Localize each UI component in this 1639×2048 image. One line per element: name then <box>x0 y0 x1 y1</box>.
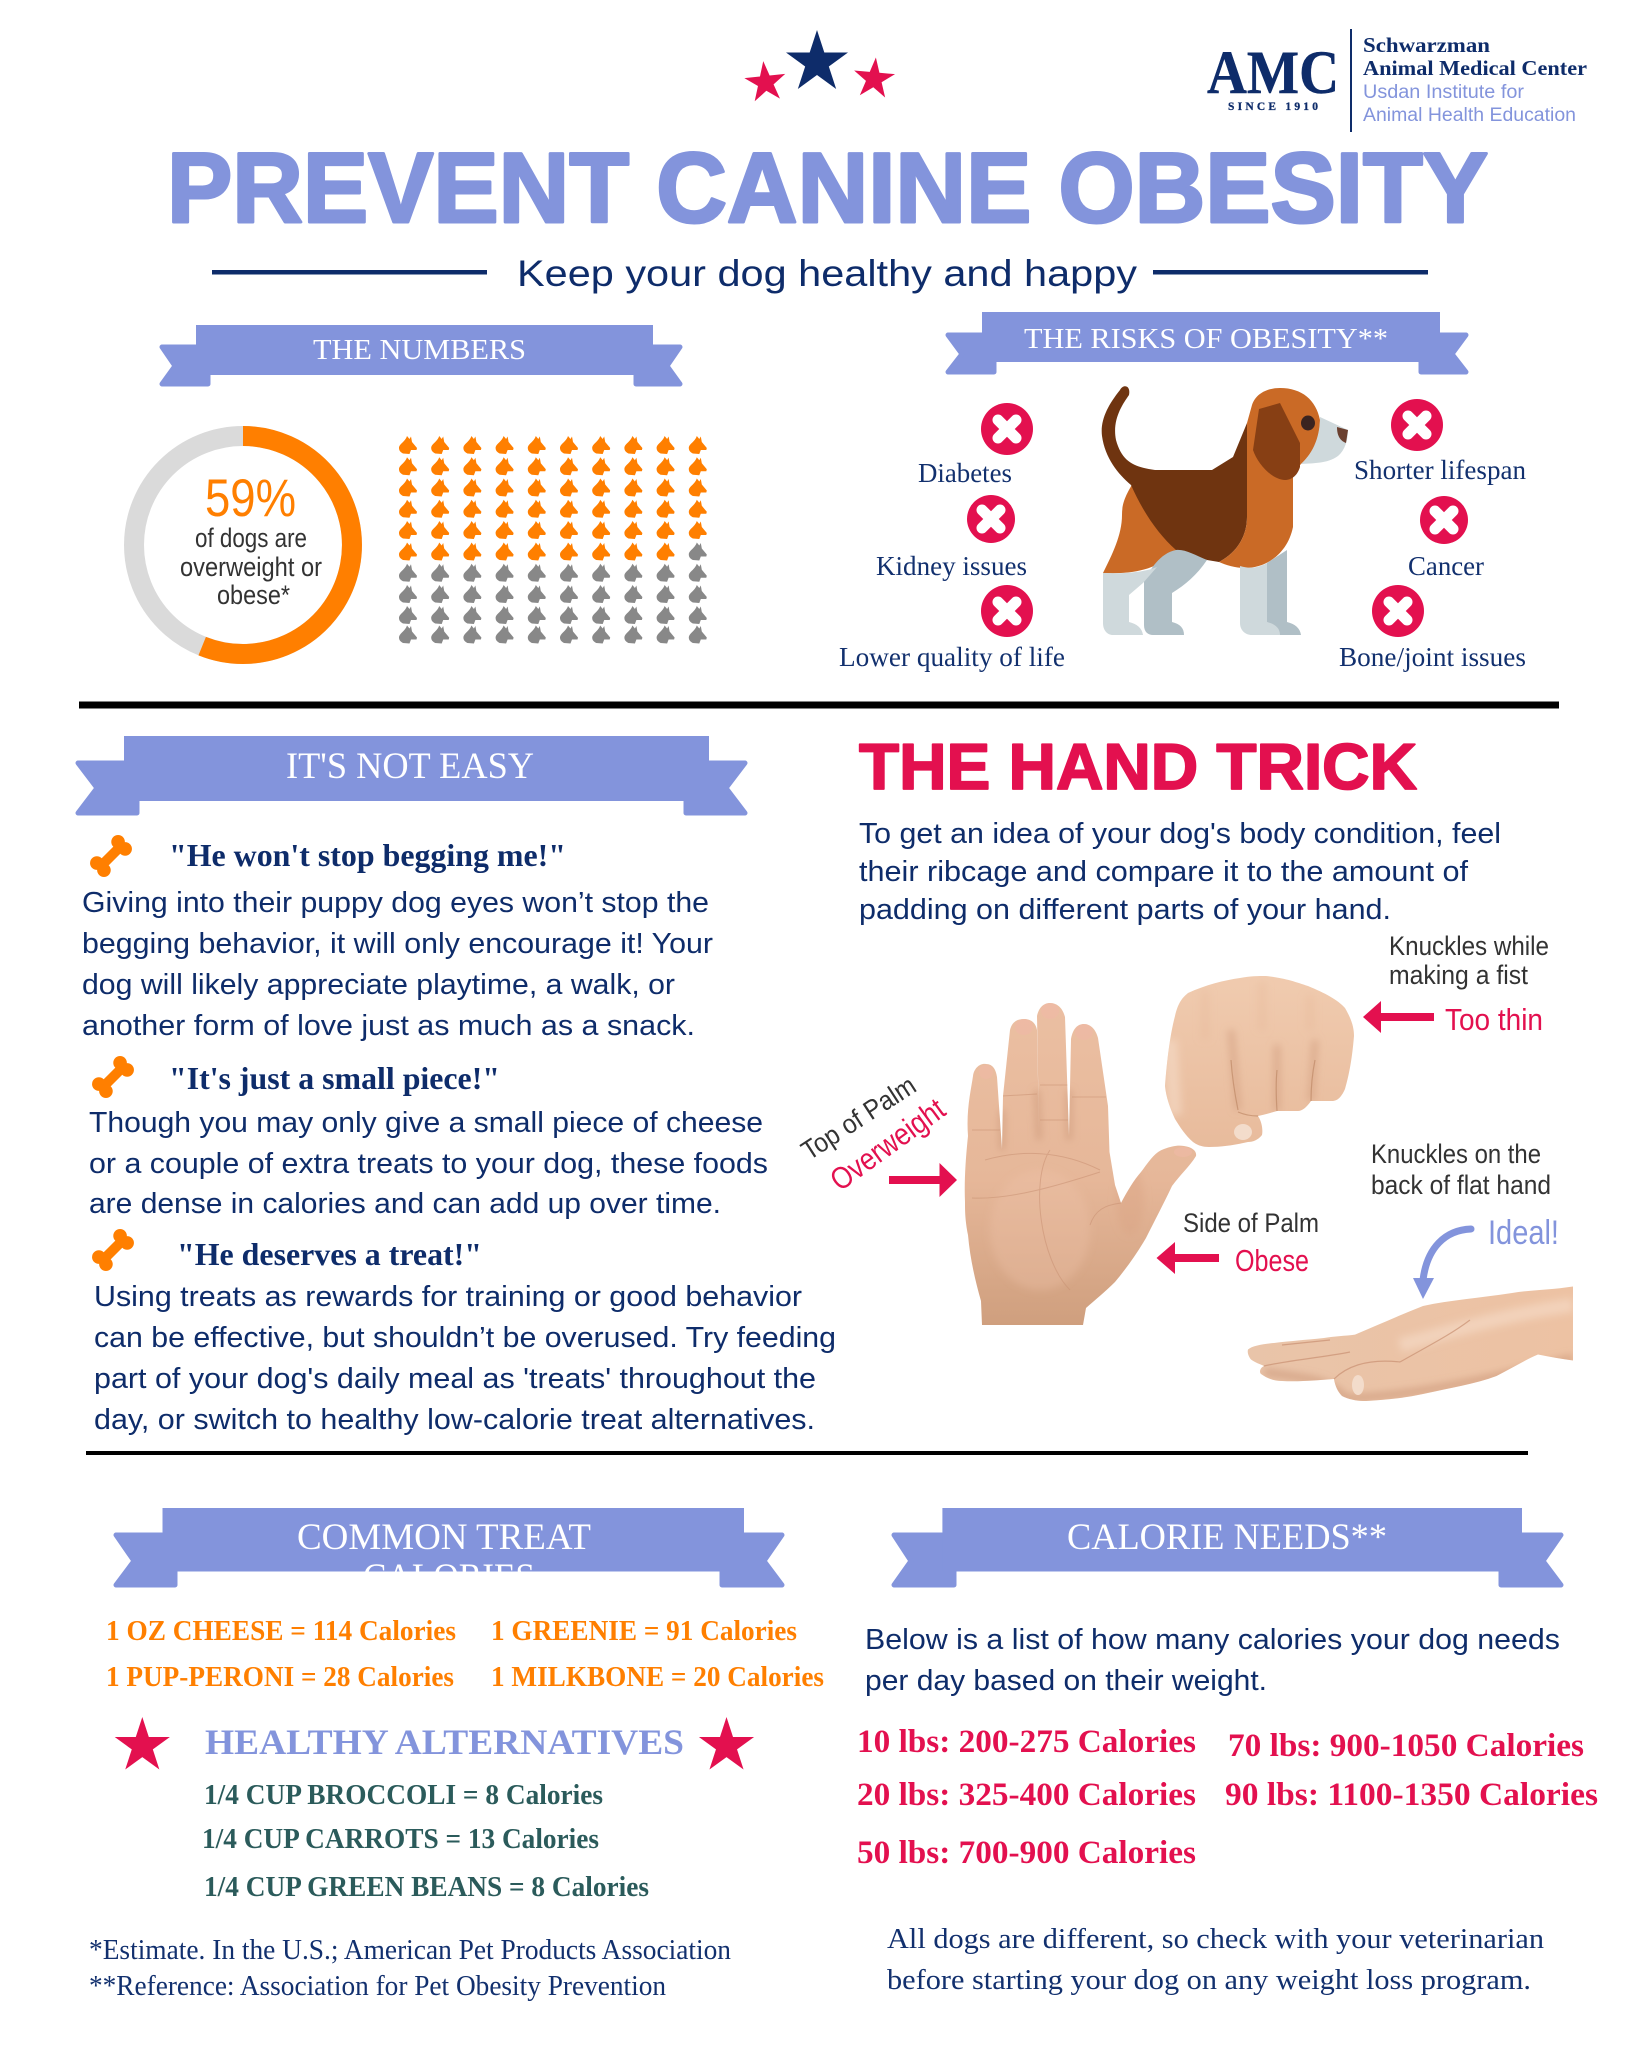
panel: deserves a treat <box>89 1226 836 1436</box>
image: fist <box>1165 976 1354 1147</box>
logo: AMC Schwarzman Animal Medical Center: Usdan Institute for <box>1363 82 1525 103</box>
banner: the numbers: THE NUMBERS <box>313 334 526 366</box>
calorie needs by weight: 50 lbs: 700-900 Calories <box>857 1835 1196 1871</box>
panel: begging <box>82 832 713 1042</box>
hand trick description: To get an idea of your dog's body condition, feel <box>859 818 1501 850</box>
treat calorie list: 1 OZ CHEESE = 114 Calories <box>106 1615 456 1647</box>
label: overweight: Top of Palm <box>796 1070 921 1166</box>
donut chart: 59% <box>134 436 352 654</box>
banner: common treat calories: COMMON TREAT <box>297 1517 591 1558</box>
risk: diabetes <box>918 403 1033 488</box>
icon: bone <box>89 1053 137 1101</box>
icon: bone <box>89 1226 137 1274</box>
calorie needs intro: per day based on their weight. <box>865 1665 1267 1697</box>
logo: AMC Schwarzman Animal Medical Center: Schwarzman <box>1363 33 1490 57</box>
closing note: All dogs are different, so check with your veterinarian <box>887 1923 1545 1955</box>
risk: bone/joint issues <box>1339 585 1526 672</box>
logo: AMC Schwarzman Animal Medical Center: SINCE 1910 <box>1228 101 1318 113</box>
risk: cancer <box>1408 496 1484 581</box>
label: overweight: Overweight <box>824 1091 952 1198</box>
healthy alternatives list: 1/4 CUP GREEN BEANS = 8 Calories <box>204 1871 649 1903</box>
treat calorie list: 1 GREENIE = 91 Calories <box>491 1615 797 1647</box>
subtitle with rules <box>212 253 1428 294</box>
risk: bone/joint issues: Bone/joint issues <box>1339 642 1526 672</box>
label: obese: Side of Palm <box>1183 1208 1319 1238</box>
image: open palm <box>965 1003 1196 1325</box>
calorie needs intro: Below is a list of how many calories your dog needs <box>865 1624 1560 1656</box>
icon: bone <box>87 832 135 880</box>
panel: small piece: Though you may only give a small piece of cheese <box>89 1107 763 1139</box>
healthy alternatives list <box>202 1779 649 1903</box>
calorie needs by weight: 10 lbs: 200-275 Calories <box>857 1724 1196 1760</box>
donut chart: 59%: 59% <box>205 469 296 528</box>
treat calorie list <box>106 1615 824 1693</box>
banner: it's not easy <box>78 736 745 813</box>
risk: diabetes: Diabetes <box>918 458 1012 488</box>
panel: small piece: or a couple of extra treats to your dog, these foods <box>89 1148 768 1180</box>
illustration: beagle dog <box>1102 386 1348 635</box>
pictogram: 59 of 100 dog heads <box>399 436 707 644</box>
heading: healthy alternatives: HEALTHY ALTERNATIVES <box>205 1722 684 1762</box>
healthy alternatives list: 1/4 CUP BROCCOLI = 8 Calories <box>204 1779 603 1811</box>
risk: shorter lifespan: Shorter lifespan <box>1354 455 1527 485</box>
panel: begging: begging behavior, it will only encourage it! Your <box>82 928 713 960</box>
risk: shorter lifespan <box>1354 399 1527 485</box>
panel: begging: Giving into their puppy dog eyes won’t stop the <box>82 887 709 919</box>
panel: deserves a treat: "He deserves a treat!" <box>177 1236 482 1272</box>
banner: the risks of obesity: THE RISKS OF OBESITY** <box>1024 323 1388 355</box>
label: too thin: Knuckles while <box>1389 931 1549 961</box>
logo: AMC Schwarzman Animal Medical Center: Animal Health Education <box>1363 105 1576 126</box>
calorie needs by weight: 20 lbs: 325-400 Calories <box>857 1777 1196 1813</box>
treat calorie list: 1 MILKBONE = 20 Calories <box>491 1661 824 1693</box>
label: obese: Obese <box>1235 1243 1309 1278</box>
panel: begging: another form of love just as much as a snack. <box>82 1010 695 1042</box>
banner: common treat calories: CALORIES <box>363 1557 535 1598</box>
label: too thin: making a fist <box>1389 960 1528 990</box>
banner: it's not easy: IT'S NOT EASY <box>286 746 534 787</box>
donut chart: 59%: overweight or <box>180 552 322 582</box>
banner: the numbers <box>162 325 680 384</box>
logo: AMC Schwarzman Animal Medical Center <box>1207 29 1587 132</box>
label: obese <box>1156 1208 1319 1278</box>
donut chart: 59%: of dogs are <box>195 523 307 553</box>
donut chart: 59%: obese* <box>217 580 290 610</box>
healthy alternatives list: 1/4 CUP CARROTS = 13 Calories <box>202 1823 599 1855</box>
risk: lower quality of life <box>839 585 1065 672</box>
footnotes <box>89 1934 731 2002</box>
panel: begging: "He won't stop begging me!" <box>169 837 566 873</box>
panel: deserves a treat: day, or switch to healthy low-calorie treat alternatives. <box>94 1404 815 1436</box>
label: ideal <box>1371 1139 1559 1299</box>
calorie needs intro <box>865 1624 1560 1697</box>
banner: common treat calories <box>114 1508 784 1588</box>
footnotes: *Estimate. In the U.S.; American Pet Products Association <box>89 1934 731 1966</box>
hand trick description: padding on different parts of your hand. <box>859 894 1391 926</box>
footnotes: **Reference: Association for Pet Obesity Prevention <box>89 1970 666 2002</box>
title: PREVENT CANINE OBESITY <box>167 132 1488 243</box>
panel: deserves a treat: part of your dog's daily meal as 'treats' throughout the <box>94 1363 816 1395</box>
logo: AMC Schwarzman Animal Medical Center: Animal Medical Center <box>1363 56 1587 80</box>
heading: healthy alternatives <box>115 1717 754 1769</box>
image: flat hand <box>1248 1286 1573 1401</box>
banner: calorie needs: CALORIE NEEDS** <box>1067 1517 1387 1558</box>
banner: the risks of obesity <box>948 312 1466 372</box>
panel: small piece <box>89 1053 768 1220</box>
panel: deserves a treat: can be effective, but shouldn’t be overused. Try feeding <box>94 1322 836 1354</box>
closing note <box>887 1923 1545 1996</box>
label: ideal: Knuckles on the <box>1371 1139 1541 1169</box>
panel: deserves a treat: Using treats as rewards for training or good behavior <box>94 1281 802 1313</box>
calorie needs by weight: 90 lbs: 1100-1350 Calories <box>1225 1777 1598 1813</box>
risk: lower quality of life: Lower quality of life <box>839 642 1065 672</box>
risk: cancer: Cancer <box>1408 551 1484 581</box>
risk: kidney issues: Kidney issues <box>876 551 1027 581</box>
risk: kidney issues <box>876 495 1027 581</box>
logo: three stars <box>743 30 896 102</box>
heading: the hand trick: THE HAND TRICK <box>859 730 1417 803</box>
logo: AMC Schwarzman Animal Medical Center: AMC <box>1207 40 1339 107</box>
label: ideal: Ideal! <box>1488 1214 1559 1252</box>
subtitle with rules: Keep your dog healthy and happy <box>517 253 1138 294</box>
treat calorie list: 1 PUP-PERONI = 28 Calories <box>106 1661 454 1693</box>
label: too thin: Too thin <box>1445 1002 1543 1037</box>
panel: small piece: are dense in calories and can add up over time. <box>89 1188 721 1220</box>
calorie needs by weight: 70 lbs: 900-1050 Calories <box>1228 1728 1584 1764</box>
label: ideal: back of flat hand <box>1371 1170 1551 1200</box>
panel: small piece: "It's just a small piece!" <box>169 1060 500 1096</box>
panel: begging: dog will likely appreciate playtime, a walk, or <box>82 969 675 1001</box>
label: too thin <box>1363 931 1549 1037</box>
hand trick description <box>859 818 1501 926</box>
hand trick description: their ribcage and compare it to the amount of <box>859 856 1469 888</box>
banner: calorie needs <box>894 1508 1561 1585</box>
calorie needs by weight <box>857 1724 1598 1871</box>
closing note: before starting your dog on any weight loss program. <box>887 1964 1531 1996</box>
